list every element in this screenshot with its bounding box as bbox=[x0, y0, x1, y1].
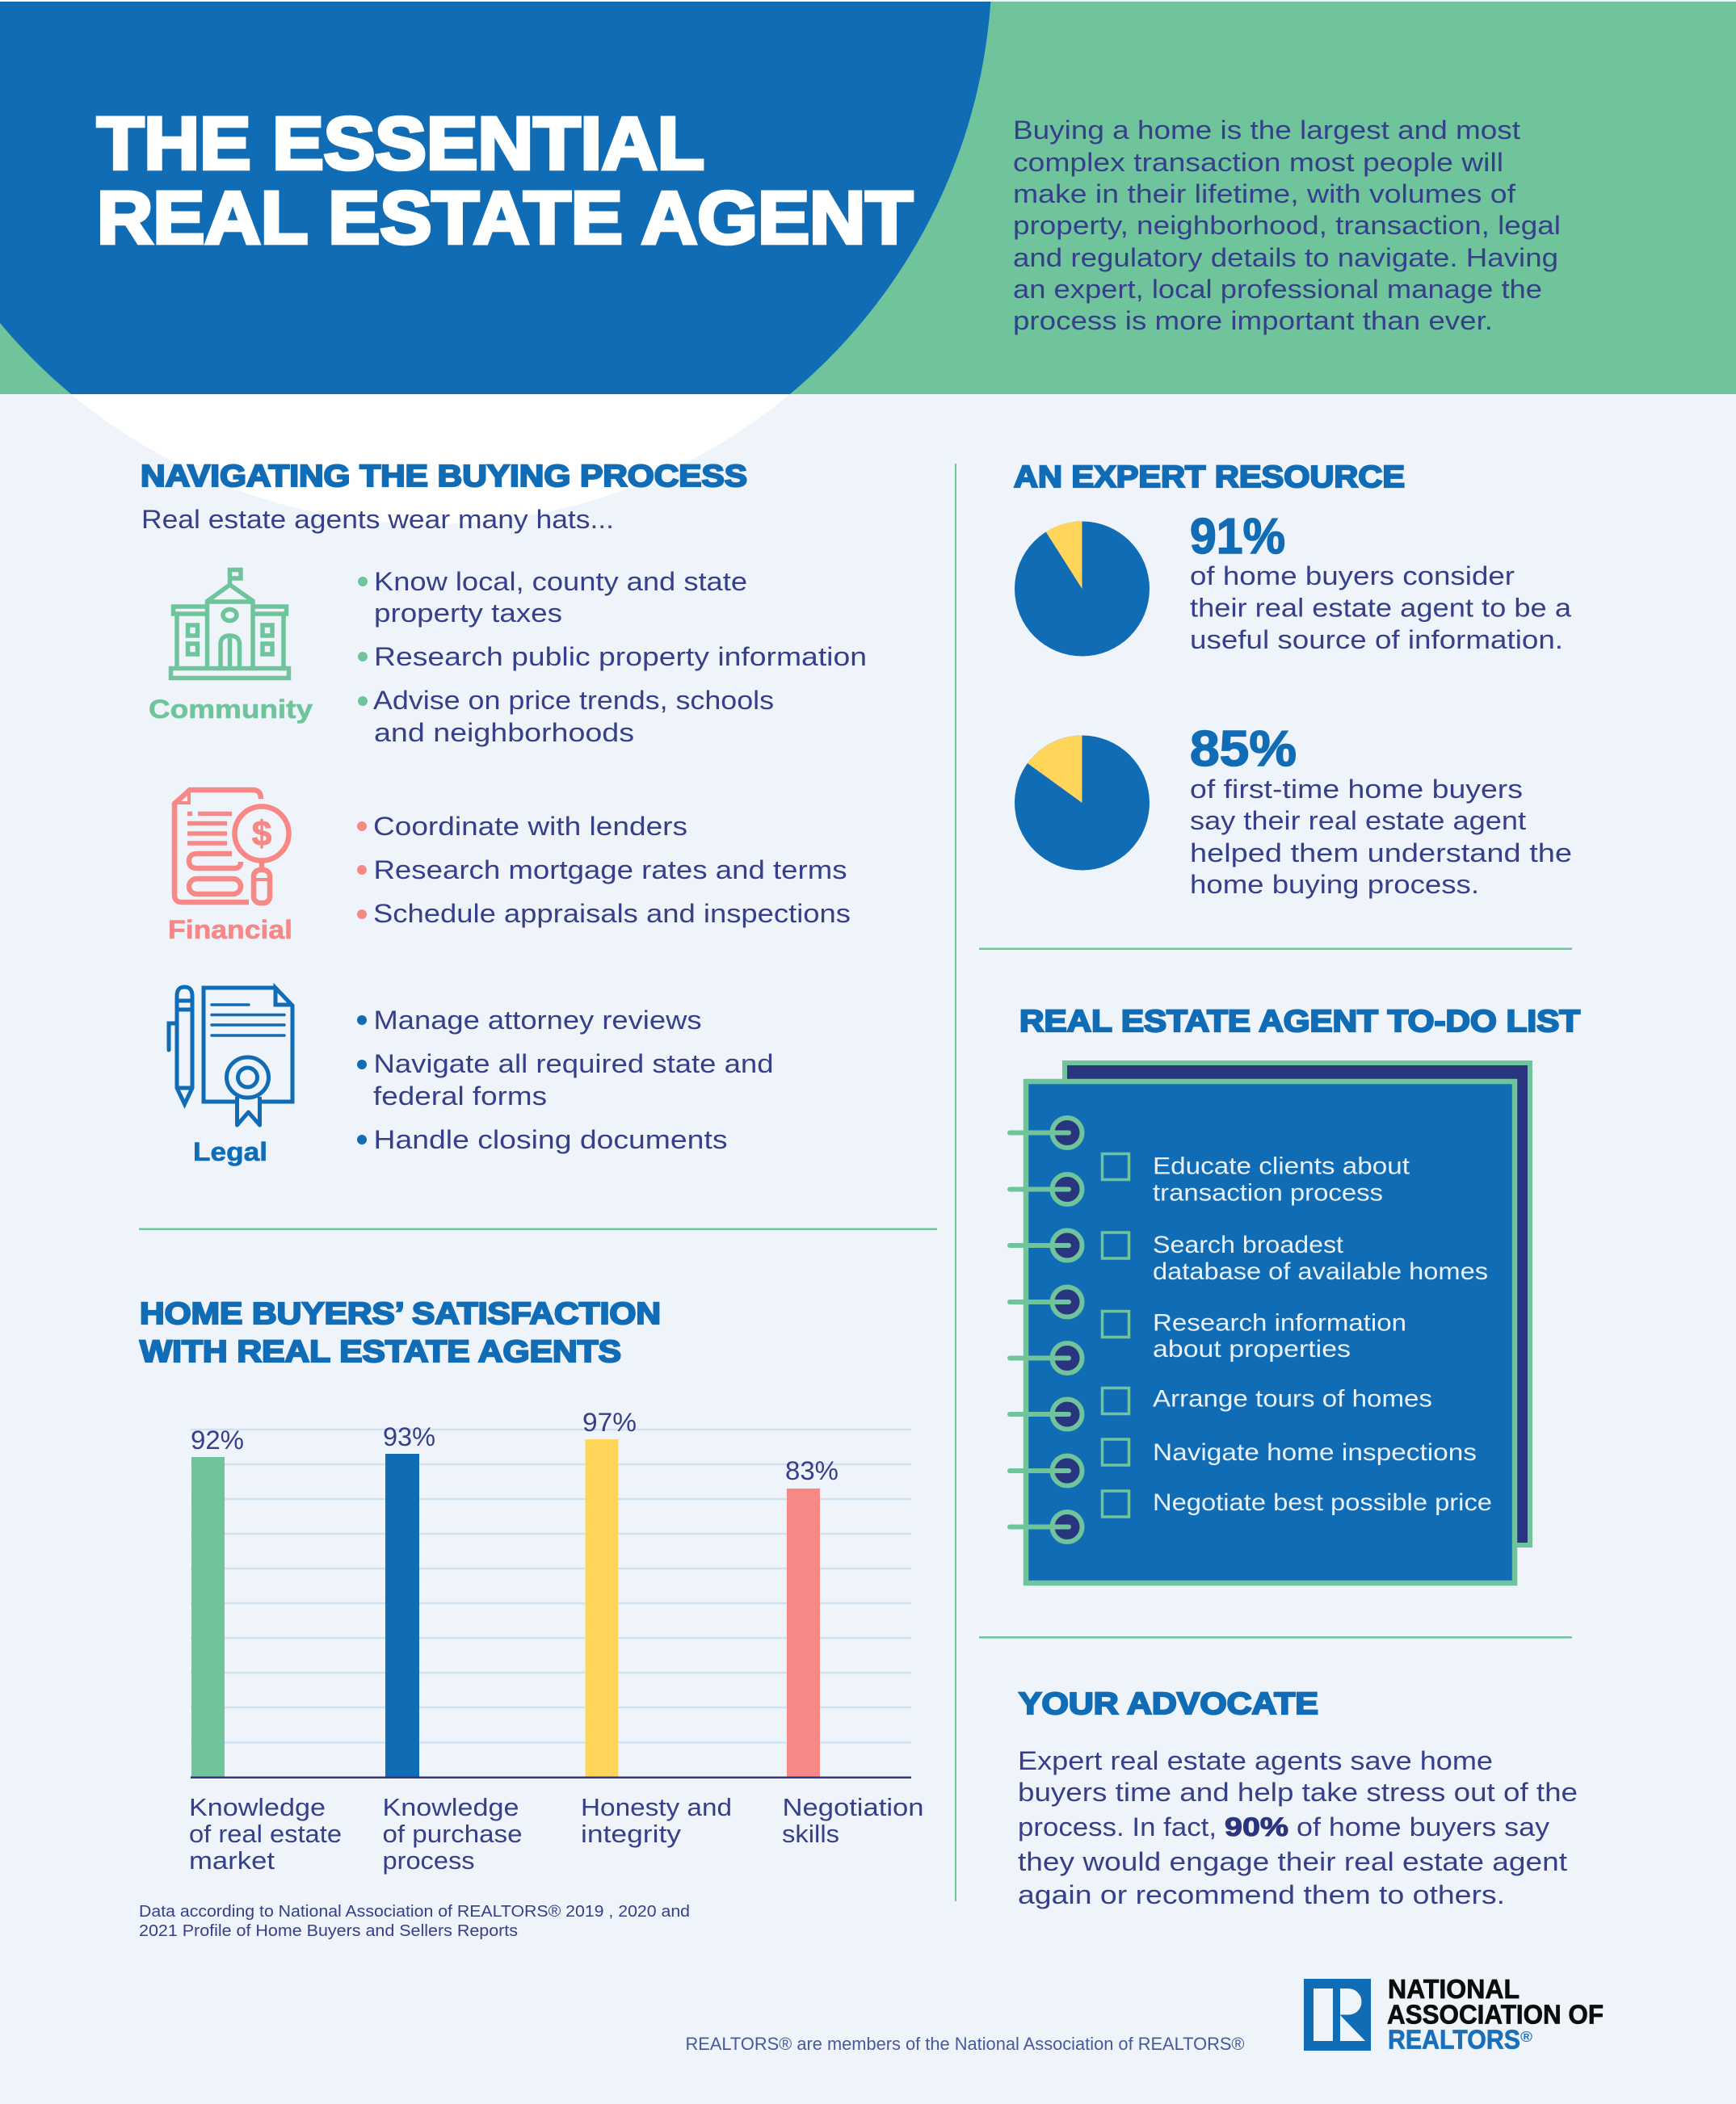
text: advocate paragraph bbox=[1018, 1746, 1578, 1909]
footer disclaimer: REALTORS® are members of the National Association of REALTORS® bbox=[685, 2034, 1244, 2054]
axis label: honesty and integrity: Honesty and bbox=[581, 1793, 732, 1821]
logo wordmark: ASSOCIATION OF bbox=[1387, 2000, 1604, 2029]
list: legal tasks: federal forms bbox=[373, 1081, 547, 1111]
title: REAL ESTATE AGENT bbox=[97, 177, 913, 259]
white circle extension bbox=[0, 0, 992, 524]
subheading: Real estate agents wear many hats... bbox=[141, 505, 614, 534]
label: community: Community bbox=[149, 695, 313, 724]
notebook back page bbox=[1065, 1063, 1530, 1545]
label: legal: Legal bbox=[193, 1137, 267, 1166]
list: community tasks: property taxes bbox=[374, 598, 562, 628]
text: 85% description: home buying process. bbox=[1190, 870, 1479, 899]
green header band bbox=[0, 2, 1736, 394]
intro paragraph: an expert, local professional manage the bbox=[1013, 275, 1542, 304]
heading: to-do list: REAL ESTATE AGENT TO-DO LIST bbox=[1019, 1005, 1580, 1039]
icon: community building bbox=[171, 570, 289, 678]
value: 92%: 92% bbox=[191, 1426, 244, 1455]
text: advocate paragraph: again or recommend them to others. bbox=[1018, 1880, 1505, 1909]
axis label: knowledge of purchase process: Knowledge bbox=[383, 1793, 519, 1821]
value: 93%: 93% bbox=[383, 1422, 435, 1451]
axis label: honesty and integrity: integrity bbox=[581, 1820, 682, 1848]
text: 85% description: helped them understand the bbox=[1190, 838, 1572, 867]
axis label: negotiation skills: Negotiation bbox=[782, 1793, 924, 1821]
panel: to-do list bbox=[1010, 1005, 1580, 1583]
stat: 85%: 85% bbox=[1190, 721, 1297, 777]
intro paragraph: Buying a home is the largest and most bbox=[1013, 115, 1520, 145]
icon: legal document with pencil and seal bbox=[169, 987, 292, 1125]
to-do items bbox=[1153, 1153, 1492, 1516]
value: 97%: 97% bbox=[582, 1408, 637, 1437]
text: advocate paragraph: buyers time and help take stress out of the bbox=[1018, 1778, 1578, 1807]
axis label: knowledge of real estate market: of real estate bbox=[189, 1820, 342, 1848]
text: advocate paragraph: Expert real estate agents save home bbox=[1018, 1746, 1493, 1775]
to-do items: Negotiate best possible price bbox=[1153, 1489, 1492, 1516]
text: 85% description bbox=[1190, 775, 1572, 899]
list: community tasks: Research public property information bbox=[374, 642, 867, 671]
bar: negotiation 83% bbox=[787, 1489, 820, 1777]
axis label: negotiation skills: skills bbox=[782, 1820, 839, 1848]
text: 91% description: useful source of information. bbox=[1190, 625, 1563, 654]
intro paragraph: complex transaction most people will bbox=[1013, 148, 1503, 177]
text: advocate paragraph: of home buyers say bbox=[1297, 1812, 1549, 1842]
text: advocate paragraph: they would engage their real estate agent bbox=[1018, 1847, 1567, 1876]
heading: expert resource: AN EXPERT RESOURCE bbox=[1014, 460, 1405, 494]
to-do items: transaction process bbox=[1153, 1179, 1383, 1207]
text: 91% description: of home buyers consider bbox=[1190, 561, 1515, 590]
bar: honesty 97% bbox=[585, 1439, 619, 1777]
to-do items: Navigate home inspections bbox=[1153, 1439, 1477, 1466]
text: advocate paragraph: process. In fact, bbox=[1018, 1812, 1217, 1842]
title bbox=[97, 103, 913, 259]
pie chart: 85% bbox=[1015, 735, 1150, 871]
list: legal tasks bbox=[357, 1006, 774, 1154]
bar chart bbox=[189, 1408, 924, 1875]
bar: purchase process 93% bbox=[385, 1454, 419, 1777]
panel: satisfaction chart section bbox=[139, 1297, 924, 1940]
heading: your advocate: YOUR ADVOCATE bbox=[1019, 1687, 1318, 1721]
list: financial tasks bbox=[357, 812, 851, 928]
list: community tasks: Know local, county and state bbox=[374, 567, 747, 596]
intro paragraph: and regulatory details to navigate. Having bbox=[1013, 243, 1558, 272]
heading: home buyers satisfaction: HOME BUYERS’ SATISFACTION bbox=[140, 1297, 661, 1331]
source note bbox=[139, 1903, 690, 1940]
list: financial tasks: Schedule appraisals and inspections bbox=[373, 899, 851, 928]
to-do items: about properties bbox=[1153, 1336, 1351, 1363]
axis label: knowledge of purchase process: process bbox=[383, 1846, 475, 1875]
axis label: negotiation skills bbox=[782, 1793, 924, 1848]
list: legal tasks: Navigate all required state and bbox=[373, 1049, 774, 1078]
blue circle bbox=[0, 2, 990, 394]
to-do items: Educate clients about bbox=[1153, 1153, 1410, 1179]
list: community tasks: and neighborhoods bbox=[374, 718, 634, 747]
notebook rings bbox=[1010, 1118, 1082, 1542]
intro paragraph: make in their lifetime, with volumes of bbox=[1013, 179, 1515, 208]
title: THE ESSENTIAL bbox=[97, 103, 704, 185]
icon glyph: dollar sign: $ bbox=[252, 814, 271, 854]
list: community tasks: Advise on price trends, schools bbox=[373, 686, 774, 715]
text: 91% description: their real estate agent to be a bbox=[1190, 593, 1571, 622]
panel: your advocate bbox=[1018, 1687, 1578, 1909]
axis label: honesty and integrity bbox=[581, 1793, 732, 1848]
icon: financial document bbox=[174, 790, 289, 903]
list: financial tasks: Research mortgage rates and terms bbox=[373, 855, 847, 884]
heading: home buyers satisfaction bbox=[140, 1297, 661, 1369]
panel: header bbox=[0, 0, 1736, 524]
bar: market knowledge 92% bbox=[191, 1457, 225, 1777]
axis label: knowledge of real estate market: Knowledge bbox=[189, 1793, 326, 1821]
source note: Data according to National Association of REALTORS® 2019 , 2020 and bbox=[139, 1903, 690, 1921]
intro paragraph: process is more important than ever. bbox=[1013, 306, 1493, 335]
text: 85% description: say their real estate agent bbox=[1190, 806, 1526, 835]
notebook front page bbox=[1026, 1081, 1515, 1583]
intro paragraph: property, neighborhood, transaction, legal bbox=[1013, 211, 1561, 240]
list: legal tasks: Handle closing documents bbox=[373, 1125, 727, 1154]
to-do items: Arrange tours of homes bbox=[1153, 1386, 1432, 1412]
stat: 91%: 91% bbox=[1190, 509, 1285, 565]
logo wordmark: ® bbox=[1520, 2029, 1532, 2045]
axis label: knowledge of real estate market bbox=[189, 1793, 342, 1875]
axis label: knowledge of purchase process bbox=[383, 1793, 522, 1875]
list: community tasks bbox=[358, 567, 867, 747]
logo: national association of realtors bbox=[1304, 1974, 1604, 2055]
value: 83%: 83% bbox=[785, 1456, 839, 1485]
list: legal tasks: Manage attorney reviews bbox=[373, 1006, 701, 1035]
logo wordmark bbox=[1387, 1974, 1604, 2055]
text: 91% description bbox=[1190, 561, 1571, 654]
source note: 2021 Profile of Home Buyers and Sellers Reports bbox=[139, 1922, 518, 1940]
heading: navigating: NAVIGATING THE BUYING PROCESS bbox=[141, 460, 747, 493]
to-do items: Research information bbox=[1153, 1310, 1406, 1336]
to-do items: database of available homes bbox=[1153, 1258, 1488, 1285]
axis label: knowledge of purchase process: of purchase bbox=[383, 1820, 522, 1848]
text: advocate paragraph: 90% bbox=[1225, 1812, 1288, 1842]
logo wordmark: REALTORS bbox=[1388, 2024, 1520, 2055]
checkboxes bbox=[1102, 1153, 1129, 1517]
label: financial: Financial bbox=[168, 915, 292, 944]
logo wordmark: NATIONAL bbox=[1388, 1974, 1520, 2004]
heading: home buyers satisfaction: WITH REAL ESTATE AGENTS bbox=[140, 1335, 621, 1369]
pie chart: 91% bbox=[1015, 522, 1150, 656]
logo mark bbox=[1304, 1979, 1371, 2051]
panel: navigating the buying process bbox=[141, 460, 867, 1166]
text: 85% description: of first-time home buyers bbox=[1190, 775, 1523, 804]
axis label: knowledge of real estate market: market bbox=[189, 1846, 275, 1875]
to-do items: Search broadest bbox=[1153, 1232, 1344, 1258]
panel: an expert resource bbox=[1014, 460, 1572, 899]
list: financial tasks: Coordinate with lenders bbox=[373, 812, 687, 841]
intro paragraph bbox=[1013, 115, 1561, 335]
